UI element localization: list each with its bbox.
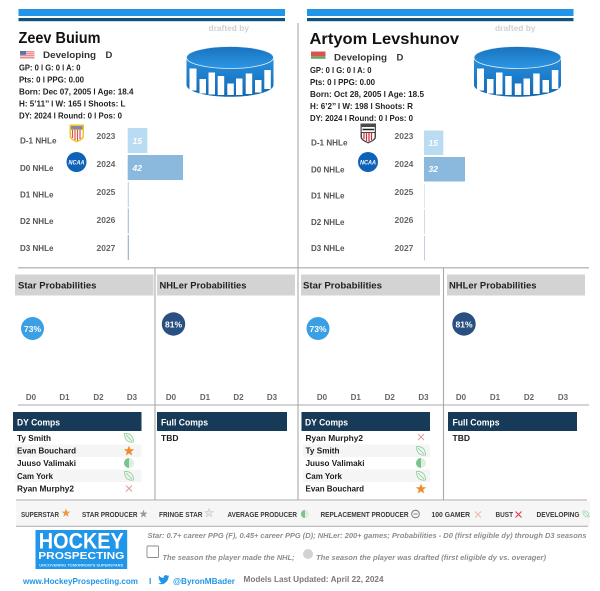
footnote: definitions: Star: 0.7+ career PPG (F), 0.45+ career PPG (D); NHLer: 200+ games; Probabilities - D0 (first eligible dy) through D3 seasons bbox=[148, 531, 586, 540]
probability bubble: 73% bbox=[24, 324, 41, 334]
legend: fringe star: FRINGE STAR bbox=[159, 512, 202, 519]
axis labels: D0 bbox=[26, 393, 37, 402]
stat lines: GP: 0 l G: 0 l A: 0 bbox=[310, 65, 372, 75]
comp names: Juuso Valimaki bbox=[17, 458, 76, 468]
header bars bbox=[18, 9, 285, 21]
heading: DY Comps bbox=[305, 418, 348, 428]
panel: Artyom Levshunov profile bbox=[307, 9, 574, 123]
row labels: D2 NHLe bbox=[311, 217, 345, 227]
heading: Star Probabilities bbox=[303, 280, 382, 292]
logo: Hockey Prospecting bbox=[36, 528, 127, 569]
stat lines: DY: 2024 l Round: 0 l Pos: 0 bbox=[310, 113, 413, 123]
heading: Full Comps bbox=[452, 418, 500, 428]
legend: bust: BUST bbox=[496, 512, 514, 519]
legend: replacement producer: REPLACEMENT PRODUCER bbox=[320, 512, 408, 519]
stat lines bbox=[19, 62, 134, 120]
legend: fringe star bbox=[159, 508, 213, 519]
season labels: 2027 bbox=[96, 243, 116, 253]
heading: NHLer Probabilities bbox=[160, 280, 246, 292]
panel: Levshunov DY comps bbox=[302, 412, 430, 494]
player name: Artyom Levshunov bbox=[310, 31, 459, 48]
season labels bbox=[394, 131, 414, 253]
icon: Twitter bird bbox=[158, 575, 169, 584]
player name: Zeev Buium bbox=[18, 30, 100, 47]
bars bbox=[424, 130, 465, 260]
logo: Hockey Prospecting: HOCKEY bbox=[39, 528, 124, 554]
icon: Belarus flag bbox=[311, 52, 326, 59]
axis labels: D2 bbox=[524, 393, 535, 402]
axis labels: D2 bbox=[233, 393, 244, 402]
website link: www.HockeyProspecting.com bbox=[22, 576, 138, 586]
position: D bbox=[106, 50, 112, 61]
stat lines: H: 5’11’’ l W: 165 l Shoots: L bbox=[19, 98, 126, 108]
drafted by label: drafted by bbox=[495, 23, 536, 33]
icon: USA Hockey shield bbox=[70, 124, 84, 142]
stat lines bbox=[310, 65, 424, 123]
axis labels: D0 bbox=[166, 393, 177, 402]
legend bbox=[16, 501, 590, 526]
header bars bbox=[307, 9, 574, 21]
season labels bbox=[96, 131, 116, 253]
heading: NHLer Probabilities bbox=[449, 280, 536, 292]
stat lines: Pts: 0 l PPG: 0.00 bbox=[19, 74, 84, 84]
icon: NCAA badge bbox=[358, 152, 378, 172]
row labels: D2 NHLe bbox=[20, 216, 54, 226]
axis labels: D1 bbox=[490, 393, 501, 402]
row shading bbox=[15, 444, 142, 482]
panel: Buium star probabilities bbox=[15, 274, 154, 402]
season labels: 2024 bbox=[96, 159, 116, 169]
bar values: 15 bbox=[132, 136, 142, 146]
comp names: Evan Bouchard bbox=[306, 484, 364, 494]
stat lines: Born: Oct 28, 2005 l Age: 18.5 bbox=[310, 89, 424, 99]
row labels: D1 NHLe bbox=[311, 190, 345, 200]
axis labels: D3 bbox=[418, 393, 429, 402]
separator: l bbox=[149, 576, 151, 586]
legend: average producer: AVERAGE PRODUCER bbox=[228, 512, 297, 519]
bar values bbox=[428, 138, 438, 174]
axis labels: D3 bbox=[267, 393, 278, 402]
axis labels: D1 bbox=[351, 393, 361, 402]
comp names: Ryan Murphy2 bbox=[17, 484, 74, 494]
comp names: Juuso Valimaki bbox=[306, 458, 364, 468]
drafted by label: drafted by bbox=[208, 23, 249, 33]
row shading bbox=[303, 444, 430, 482]
panel: Levshunov NHLer probabilities bbox=[447, 274, 585, 402]
chart: Artyom Levshunov NHLe by season bbox=[311, 124, 465, 260]
heading: DY Comps bbox=[17, 418, 60, 428]
comp names bbox=[17, 433, 76, 494]
legend: bust bbox=[496, 512, 522, 519]
probability bubble: 81% bbox=[455, 320, 473, 330]
heading: Full Comps bbox=[161, 418, 208, 428]
bar values: 42 bbox=[132, 163, 142, 173]
legend: superstar: SUPERSTAR bbox=[21, 512, 59, 519]
row labels bbox=[20, 136, 57, 253]
comp names: Ryan Murphy2 bbox=[306, 433, 363, 443]
stat lines: GP: 0 l G: 0 l A: 0 bbox=[19, 62, 81, 72]
comp names: Ty Smith bbox=[306, 446, 340, 456]
panel: Buium NHLer probabilities bbox=[157, 274, 295, 402]
panel: Levshunov star probabilities bbox=[301, 274, 440, 402]
row labels: D3 NHLe bbox=[311, 243, 345, 253]
icon: puck logo bbox=[186, 46, 274, 97]
axis labels bbox=[456, 393, 569, 402]
icon: NCAA badge: NCAA bbox=[360, 160, 376, 166]
season labels: 2025 bbox=[96, 187, 116, 197]
bars bbox=[128, 128, 183, 260]
status: Developing bbox=[334, 52, 387, 64]
legend: 100 gamer: 100 GAMER bbox=[432, 512, 470, 519]
stat lines: H: 6’2’’ l W: 198 l Shoots: R bbox=[310, 101, 413, 111]
season labels: 2027 bbox=[394, 243, 414, 253]
row labels: D-1 NHLe bbox=[20, 136, 57, 146]
icon: NCAA badge: NCAA bbox=[68, 160, 85, 166]
legend: developing: DEVELOPING bbox=[536, 512, 580, 519]
row labels: D1 NHLe bbox=[20, 190, 54, 200]
legend: star producer: STAR PRODUCER bbox=[82, 512, 138, 519]
axis labels: D3 bbox=[127, 393, 138, 402]
row labels: D-1 NHLe bbox=[311, 138, 348, 148]
logo: Hockey Prospecting: PROSPECTING bbox=[38, 550, 124, 562]
comp names: Ty Smith bbox=[17, 433, 51, 443]
axis labels: D0 bbox=[456, 393, 467, 402]
position: D bbox=[396, 52, 404, 64]
stat lines: Born: Dec 07, 2005 l Age: 18.4 bbox=[19, 86, 134, 96]
season labels: 2026 bbox=[394, 215, 414, 225]
season labels: 2023 bbox=[394, 131, 414, 141]
probability bubble: 73% bbox=[309, 324, 327, 334]
outcome icons bbox=[124, 433, 134, 492]
season labels: 2025 bbox=[394, 187, 414, 197]
panel: Zeev Buium profile bbox=[18, 9, 285, 120]
axis labels: D2 bbox=[93, 393, 104, 402]
panel: Buium full comps bbox=[157, 412, 287, 443]
bar values: 15 bbox=[428, 138, 438, 148]
axis labels bbox=[26, 393, 138, 402]
legend: NHL season box bbox=[147, 546, 295, 562]
models updated note: Models Last Updated: April 22, 2024 bbox=[244, 574, 384, 584]
legend: draft season circle: The season the player was drafted (first eligible dy vs. overager) bbox=[316, 553, 547, 562]
icon: puck logo bbox=[474, 46, 561, 97]
chart: Zeev Buium NHLe by season bbox=[20, 124, 183, 260]
axis labels: D3 bbox=[558, 393, 569, 402]
logo: Hockey Prospecting: UNCOVERING TOMORROW'S SUPERSTARS bbox=[39, 564, 124, 568]
row labels bbox=[311, 138, 348, 253]
panel: Levshunov full comps bbox=[448, 412, 577, 443]
panel: Buium DY comps bbox=[13, 412, 142, 494]
season labels: 2026 bbox=[96, 215, 116, 225]
season labels: 2023 bbox=[96, 131, 116, 141]
status and position: Developing bbox=[43, 50, 96, 61]
probability bubble: 81% bbox=[165, 320, 182, 330]
comp text: TBD bbox=[161, 433, 178, 443]
axis labels: D1 bbox=[200, 393, 211, 402]
row labels: D3 NHLe bbox=[20, 243, 54, 253]
axis labels: D0 bbox=[317, 393, 328, 402]
comp names bbox=[306, 433, 364, 494]
stat lines: DY: 2024 l Round: 0 l Pos: 0 bbox=[19, 110, 122, 120]
comp names: Cam York bbox=[17, 471, 53, 481]
comp names: Evan Bouchard bbox=[17, 446, 76, 456]
axis labels bbox=[166, 393, 278, 402]
icon: USA flag bbox=[20, 51, 34, 58]
legend: draft season circle bbox=[303, 549, 547, 562]
comp text: TBD bbox=[452, 433, 470, 443]
bar values: 32 bbox=[428, 164, 438, 174]
icon: USHL shield bbox=[360, 124, 376, 144]
legend: superstar bbox=[21, 508, 70, 519]
row labels: D0 NHLe bbox=[20, 163, 54, 173]
heading: Star Probabilities bbox=[18, 280, 96, 292]
comp names: Cam York bbox=[306, 471, 342, 481]
outcome icons bbox=[416, 434, 426, 494]
axis labels bbox=[317, 393, 429, 402]
stat lines: Pts: 0 l PPG: 0.00 bbox=[310, 77, 375, 87]
legend: NHL season box: The season the player made the NHL; bbox=[162, 553, 295, 562]
bar values bbox=[132, 136, 142, 173]
row labels: D0 NHLe bbox=[311, 164, 345, 174]
panel dividers bbox=[16, 23, 589, 500]
twitter handle: @ByronMBader bbox=[173, 576, 236, 586]
icon: NCAA badge bbox=[66, 152, 86, 172]
axis labels: D1 bbox=[59, 393, 70, 402]
season labels: 2024 bbox=[394, 159, 414, 169]
axis labels: D2 bbox=[385, 393, 395, 402]
